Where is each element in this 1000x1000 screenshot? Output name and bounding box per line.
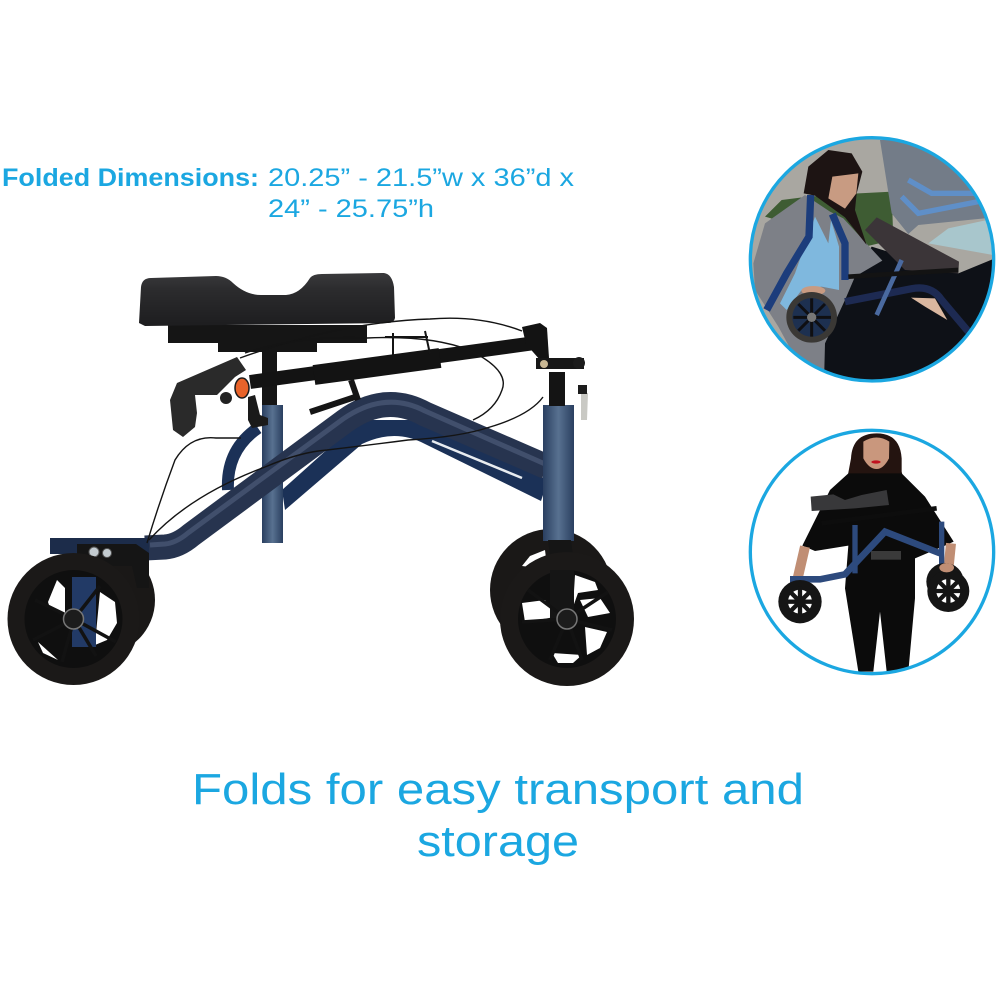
knee pad on walker [865, 217, 959, 273]
folded dimensions text: Folded Dimensions: [2, 164, 259, 192]
face [863, 437, 889, 469]
caption: storage [417, 817, 579, 866]
folded frame [845, 288, 968, 332]
front wheel [8, 553, 140, 685]
bolts [89, 547, 112, 558]
blue shirt [780, 217, 839, 310]
arms [798, 543, 951, 578]
caption: Folds for easy transport and [192, 765, 804, 814]
orange reflector [235, 378, 249, 398]
height adjust clamp [536, 357, 588, 420]
handlebar tube [250, 343, 535, 382]
hand on rear post [939, 563, 954, 572]
top right folding joint [522, 323, 549, 360]
rear vertical post [543, 405, 574, 541]
circle border [750, 430, 994, 674]
frame tubes [790, 522, 942, 579]
wheels [778, 563, 969, 623]
photo circle: carrying folded walker [750, 430, 994, 674]
lower blue seat post [262, 405, 283, 543]
upper black seat post [262, 345, 277, 407]
seat bottom plate [168, 325, 367, 352]
brake clamp [248, 395, 268, 428]
bracket slit [432, 441, 522, 478]
front platform [50, 538, 149, 554]
knee walker product image [8, 273, 634, 686]
car window [928, 219, 993, 255]
cardigan trim [767, 195, 845, 310]
brake knob [220, 392, 232, 404]
hedge [765, 192, 893, 247]
belt [871, 551, 901, 560]
lips [871, 460, 881, 464]
hand [801, 286, 826, 294]
rear wheel [500, 552, 634, 686]
hair [848, 433, 902, 474]
side arc bracket [228, 428, 258, 490]
wheel in photo [786, 292, 837, 343]
rear lower fork [548, 540, 573, 556]
circle border [750, 138, 994, 381]
reflection [911, 298, 947, 320]
hair [804, 150, 867, 245]
folded dimensions text [2, 164, 575, 223]
rear upper post [549, 372, 565, 406]
photo circle: loading into car trunk [745, 130, 1000, 385]
folded dimensions text: 24” - 25.75”h [268, 195, 434, 223]
folding latch [310, 380, 358, 412]
handlebar [931, 506, 937, 511]
caption [192, 765, 804, 866]
wall background [752, 139, 992, 346]
lower frame bracket [282, 420, 548, 510]
main frame tube [145, 402, 547, 548]
front black bracket [77, 544, 149, 588]
rear wheels behind frame [45, 529, 612, 655]
knee pad [139, 273, 395, 326]
folded dimensions text: 20.25” - 21.5”w x 36”d x [268, 164, 575, 192]
face [828, 173, 858, 209]
cardigan [753, 195, 882, 370]
trunk lid [880, 140, 995, 234]
black outfit [802, 473, 954, 672]
brake handle and grip [170, 357, 246, 437]
knee pad [811, 490, 889, 511]
car body [822, 247, 995, 380]
brake cables [147, 318, 543, 543]
